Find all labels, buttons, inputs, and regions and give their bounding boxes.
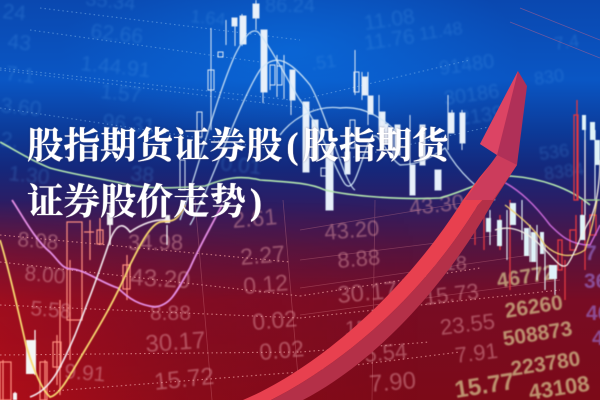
faint data table: blue numbers: 11.76 [362, 25, 416, 55]
background chart illustration: 7 [585, 242, 597, 265]
arrow shaft light band [243, 155, 510, 400]
moving averages: blue group [180, 31, 495, 225]
faint data table: pink numbers: 8.88 [336, 244, 381, 273]
faint data table: pink numbers: 15.72 [153, 363, 215, 396]
faint data table: blue numbers [0, 0, 585, 189]
faint data table: yellow volume numbers: 46772 [495, 261, 556, 293]
faint data table: blue numbers: 2139 [458, 102, 505, 130]
faint data table: blue numbers: 8384 [543, 159, 585, 184]
faint data table: pink numbers: 5.58 [30, 297, 72, 324]
faint data table: pink numbers: 7.90 [368, 367, 417, 398]
faint data table: yellow volume numbers: 508873 [501, 317, 574, 351]
title: 股指期货证券股 股指期货证券股价走势 [27, 125, 448, 222]
faint data table: yellow volume numbers: 223780 [509, 347, 582, 381]
faint data table: pink numbers: 15.73 [423, 278, 480, 310]
faint data table: pink numbers: 9.91 [64, 360, 106, 387]
faint data table: pink numbers: 0.02 [251, 305, 298, 335]
faint data table: pink numbers: 4.18 [428, 253, 467, 275]
faint data table: blue numbers: 11.48 [418, 18, 464, 44]
faint data table: pink numbers: 8.88 [150, 302, 191, 325]
faint data table: pink numbers: 43.20 [323, 215, 380, 245]
faint data table: pink numbers: 2.61 [231, 203, 278, 233]
faint data table: blue numbers: 43 [6, 30, 32, 55]
faint data table: pink numbers: 43.30 [408, 189, 465, 220]
faint data table: blue numbers: 30186 [443, 80, 501, 110]
faint data table: pink numbers: 15 [345, 318, 367, 340]
moving averages: pink, white and yellow [0, 200, 222, 397]
faint data table: pink numbers: 43.20 [130, 264, 191, 294]
arrow head [465, 71, 518, 200]
faint data table: pink numbers: 0.12 [242, 269, 289, 299]
faint data table: blue numbers: 7.1 [4, 62, 36, 88]
rising red arrow [243, 71, 527, 400]
faint data table: blue numbers: 536 [538, 140, 570, 164]
faint data table: pink numbers: 8.08 [17, 228, 59, 255]
moving averages: right cluster [495, 160, 600, 266]
faint data table: blue numbers: 7.4 [553, 31, 580, 54]
faint data table: pink numbers: 23.55 [439, 308, 496, 340]
faint data table: pink numbers: 30.17 [336, 277, 398, 309]
faint data table: blue numbers: 1.64 [190, 6, 227, 30]
faint data table: blue numbers: 24 [1, 0, 27, 25]
faint data table: pink numbers: 5.54 [363, 338, 408, 367]
faint data table: pink numbers: 7.91 [454, 338, 499, 368]
faint data table: blue numbers: 3.60 [0, 94, 43, 121]
faint data table: blue numbers: 1.57 [99, 80, 143, 107]
faint data table: blue numbers: 62.66 [89, 20, 144, 48]
faint data table: blue numbers: 11.08 [362, 5, 416, 35]
candlestick chart: upper cluster [180, 0, 465, 210]
faint data table: pink numbers: 0.02 [258, 335, 305, 365]
faint data table: blue numbers: 2. [0, 128, 19, 153]
faint data table: pink numbers: 8.00 [24, 262, 66, 289]
title: ) [250, 181, 262, 222]
faint data table: blue numbers: 91480 [438, 50, 496, 80]
faint data table: blue numbers: 830 [533, 65, 565, 89]
faint data table: blue numbers: 1.44.91 [79, 52, 152, 82]
faint data table: blue numbers: 38 [129, 162, 155, 187]
faint data table: pink numbers [17, 189, 499, 398]
moving average: pale green [0, 142, 590, 205]
candlestick chart: right cluster [475, 100, 600, 300]
title: ( [286, 125, 299, 166]
faint data table: blue numbers: .51 [310, 51, 337, 74]
candlestick chart: lower-left cluster [0, 205, 170, 400]
faint data table: pink numbers: 34.98 [128, 230, 183, 255]
faint data table: blue numbers: 0.01 [219, 152, 263, 179]
faint data table: pink numbers: 30.17 [145, 327, 206, 358]
faint data table: blue numbers: 96.31 [101, 110, 156, 138]
faint data table: blue numbers: 1.30 [7, 162, 51, 189]
faint data table: yellow volume numbers: 26260 [503, 291, 564, 323]
faint data table: pink numbers: 2.27 [239, 240, 286, 270]
arrow shaft dark band [271, 165, 517, 400]
faint data table: yellow volume numbers [453, 261, 591, 400]
